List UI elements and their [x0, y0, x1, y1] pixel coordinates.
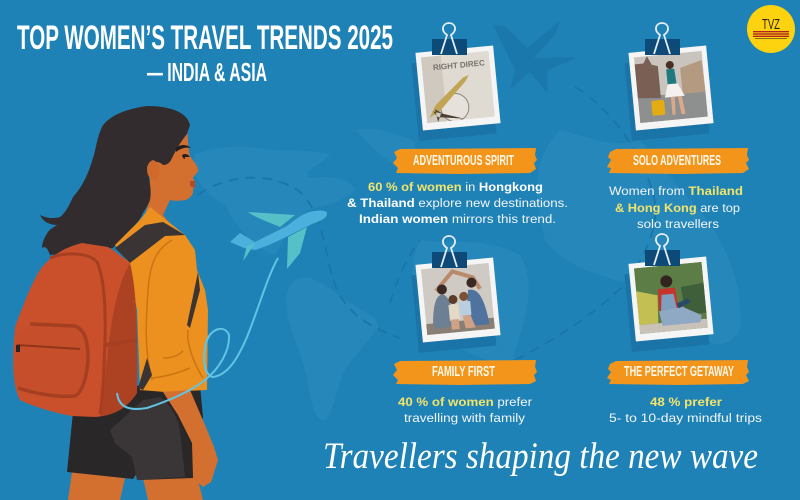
banner: THE PERFECT GETAWAY — [624, 363, 734, 380]
banner — [393, 148, 537, 174]
description: 40 % of women prefer — [398, 395, 532, 409]
ear — [147, 160, 159, 181]
description — [398, 395, 532, 425]
description — [609, 395, 762, 425]
hair — [40, 106, 190, 255]
subtitle: — INDIA & ASIA — [147, 57, 267, 87]
binder clip — [432, 236, 467, 268]
banner: ADVENTUROUS SPIRIT — [413, 152, 514, 169]
neck and face — [143, 128, 198, 226]
banner — [607, 360, 749, 385]
binder clip — [645, 234, 680, 266]
plane silhouette watermark — [493, 22, 576, 93]
dashed flight paths — [198, 87, 655, 367]
plane — [230, 211, 327, 269]
polaroid photo: reading in garden — [623, 256, 715, 352]
woman traveller illustration — [13, 106, 218, 500]
card: adventurous spirit — [347, 23, 568, 226]
polaroid photo: compass: RIGHT DIREC — [433, 58, 485, 72]
description: Women from Thailand — [609, 184, 743, 198]
card: solo adventures — [607, 23, 749, 231]
card: family first — [393, 236, 537, 425]
polaroid photo: compass — [410, 45, 502, 141]
world map silhouettes — [194, 129, 741, 420]
description: solo travellers — [637, 217, 719, 231]
polaroid photo: solo traveller — [623, 45, 715, 141]
description — [609, 184, 743, 231]
eyebrow and eye — [176, 145, 191, 159]
front pocket — [14, 324, 88, 396]
backpack strap — [115, 222, 200, 390]
shorts — [67, 385, 203, 480]
description: & Hong Kong are top — [615, 201, 740, 215]
card: the perfect getaway — [607, 234, 762, 425]
binder clip — [645, 23, 680, 55]
shirt — [115, 207, 208, 392]
description — [347, 180, 568, 226]
binder clip — [432, 23, 467, 55]
description: 48 % prefer — [650, 395, 722, 409]
sleeve folds — [146, 240, 203, 380]
logo — [747, 5, 795, 53]
description: & Thailand explore new destinations. — [347, 196, 568, 210]
description: travelling with family — [404, 411, 526, 425]
lips — [190, 181, 195, 188]
flight trail — [117, 258, 278, 409]
title: TOP WOMEN’S TRAVEL TRENDS 2025 — [17, 19, 393, 57]
legs — [68, 472, 203, 500]
banner — [607, 148, 749, 174]
arm and hand — [163, 390, 218, 487]
description: Indian women mirrors this trend. — [359, 212, 556, 226]
banner: FAMILY FIRST — [432, 363, 495, 380]
description: 60 % of women in Hongkong — [368, 180, 543, 194]
banner: SOLO ADVENTURES — [633, 152, 721, 169]
banner — [393, 360, 537, 385]
logo: TVZ — [762, 16, 780, 33]
backpack — [13, 243, 137, 417]
polaroid photo: family — [410, 257, 502, 353]
script tagline: Travellers shaping the new wave — [323, 436, 758, 477]
description: 5- to 10-day mindful trips — [609, 411, 762, 425]
